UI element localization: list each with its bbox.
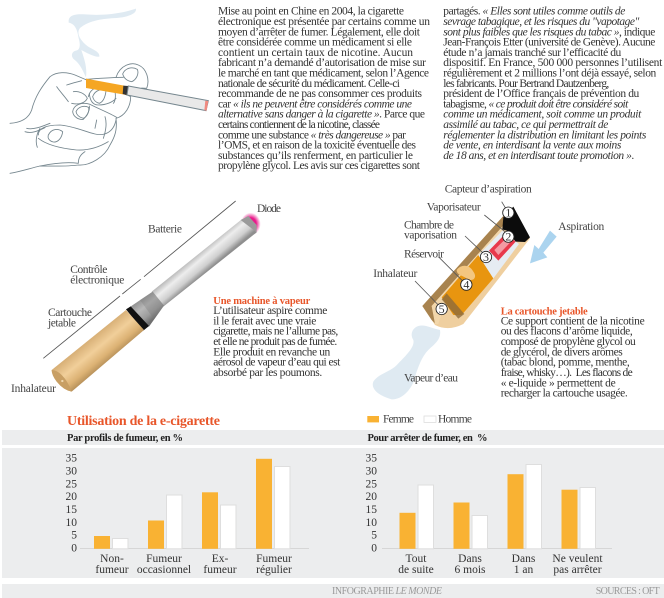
left chart bars homme — [112, 466, 290, 549]
labels: disposable cartridge: Inhalateur — [373, 268, 417, 280]
body text: first column: le marché en tant que médicament, selon l’Agence — [218, 68, 429, 80]
right chart baseline — [382, 548, 612, 549]
caption: une machine à vapeur: il le ferait avec une vraie — [213, 315, 316, 327]
body text: second column: président de l’Office français de prévention du — [443, 88, 640, 100]
labels: electronic cigarette: électronique — [70, 275, 124, 287]
cigarette — [86, 79, 208, 111]
left chart baseline — [80, 548, 309, 549]
caption: une machine à vapeur: Une machine à vapeur — [213, 296, 311, 307]
cartridge body and internals — [415, 202, 530, 328]
labels: disposable cartridge: Chambre de — [404, 219, 454, 231]
labels: electronic cigarette — [11, 203, 281, 395]
cartridge body and internals: 2 — [505, 230, 511, 244]
body text: first column: contient un certain taux de nicotine. Aucun — [218, 47, 413, 59]
body text: first column: nationale de sécurité du médicament. Celle-ci — [218, 78, 400, 90]
caption: la cartouche jetable: composé de propylène glycol ou — [501, 336, 636, 348]
left chart category labels: Fumeur — [146, 553, 182, 565]
caption: la cartouche jetable: fraise, whisky…). Les flacons de — [501, 367, 633, 379]
labels: electronic cigarette: Batterie — [148, 224, 182, 236]
body text: second column: réglementer la distribution en limitant les points — [443, 129, 647, 141]
right chart y axis: 15 — [366, 504, 377, 516]
body text: second column: les fabricants. Pour Bertrand Dautzenberg, — [443, 78, 609, 90]
left chart category labels: Non- — [100, 553, 124, 565]
body text: first column: être considérée comme un médicament si elle — [218, 37, 412, 49]
arrow: aspiration — [530, 231, 557, 263]
cartridge body and internals: 4 — [463, 278, 469, 292]
caption: la cartouche jetable — [501, 306, 645, 400]
right chart y axis: 10 — [366, 517, 377, 529]
right chart y axis: 20 — [366, 491, 377, 503]
black ring — [126, 306, 149, 331]
left chart y axis: 35 — [66, 453, 77, 465]
body text: first column: recommande de ne pas consommer ces produits — [218, 88, 423, 100]
hand outline — [10, 64, 148, 173]
cartridge body and internals: 1 — [505, 206, 511, 220]
body text: first column: fabricant n’a demandé d’autorisation de mise sur — [218, 57, 426, 69]
cartridge body and internals: 5 — [439, 302, 445, 316]
body text: second column: dispositif. En France, 500 000 personnes l’utilisent — [443, 57, 663, 69]
right chart category labels: 1 an — [514, 564, 533, 576]
caption: une machine à vapeur: cigarette, mais ne l’allume pas, — [213, 326, 338, 338]
body text: first column: car « ils ne peuvent être considérés comme une — [218, 98, 412, 110]
left chart: par profils de fumeur — [66, 433, 309, 576]
right chart y axis: 0 — [371, 542, 377, 554]
left chart heading: Par profils de fumeur, en % — [67, 433, 183, 444]
left chart y axis: 10 — [66, 517, 77, 529]
labels: disposable cartridge: Vapeur d’eau — [404, 372, 458, 384]
labels: disposable cartridge: Vaporisateur — [427, 201, 481, 213]
left chart category labels: occasionnel — [137, 564, 191, 576]
right chart category labels: 6 mois — [454, 564, 486, 576]
battery — [152, 219, 257, 307]
body text: first column: alternative sans danger à la cigarette ». Parce que — [218, 109, 425, 121]
diode glow — [241, 213, 261, 235]
left chart category labels: régulier — [256, 564, 292, 576]
illustration: electronic cigarette — [43, 201, 261, 392]
caption: une machine à vapeur: L’utilisateur aspire comme — [213, 305, 327, 317]
labels: electronic cigarette: Contrôle — [70, 264, 107, 276]
right chart category labels: Tout — [406, 553, 427, 565]
labels: electronic cigarette: Diode — [257, 203, 281, 215]
footer band — [2, 584, 664, 598]
numbered markers — [436, 207, 514, 315]
caption: la cartouche jetable: (tabac blond, pomme, menthe, — [501, 357, 630, 369]
left chart y axis: 15 — [66, 504, 77, 516]
cartridge — [52, 310, 144, 392]
left chart category labels — [95, 553, 292, 576]
left chart category labels: fumeur — [95, 564, 129, 576]
caption: une machine à vapeur — [213, 296, 341, 379]
caption: la cartouche jetable: de glycérol, de divers arômes — [501, 346, 623, 358]
legend: Homme — [438, 414, 472, 426]
illustration: hand holding an e-cigarette — [10, 9, 208, 173]
footer credit: INFOGRAPHIE LE MONDE — [332, 586, 442, 597]
body text: first column: l’OMS, et en raison de la toxicité éventuelle des — [218, 140, 417, 152]
body text: second column: partagés. « Elles sont utiles comme outils de — [443, 6, 625, 18]
right chart category labels: Ne veulent — [552, 553, 603, 565]
body text: second column: régulièrement et 2 millions l’ont déjà essayé, selon — [443, 68, 657, 80]
body text: second column: de vente, en interdisant la vente aux moins — [443, 140, 622, 152]
body text: first column: certains contiennent de la nicotine, classée — [218, 119, 380, 131]
body text: first column: propylène glycol. Les avis sur ces cigarettes sont — [218, 160, 421, 172]
labels: disposable cartridge: Aspiration — [558, 221, 605, 233]
body text: second column: sevrage tabagique, et les risques du "vapotage" — [443, 16, 639, 28]
labels: disposable cartridge: Capteur d’aspiration — [445, 184, 532, 196]
chart background panel — [2, 448, 664, 578]
body text: first column: moyen d’arrêter de fumer. Légalement, elle doit — [218, 26, 421, 38]
left chart y axis: 5 — [71, 530, 77, 542]
body text: second column: sont plus faibles que les risques du tabac », indique — [443, 26, 655, 38]
guide lines — [43, 201, 236, 358]
left chart category labels: Fumeur — [256, 553, 292, 565]
right chart y axis: 25 — [366, 478, 377, 490]
chart section title: Utilisation de la e-cigarette — [67, 414, 220, 429]
caption: la cartouche jetable: Ce support contient de la nicotine — [501, 315, 645, 327]
body text: second column: tabagisme, « ce produit doit être considéré soit — [443, 98, 629, 110]
right chart y axis: 30 — [366, 466, 377, 478]
body text: first column — [218, 6, 430, 172]
cartridge body and internals: 3 — [483, 250, 489, 264]
caption: une machine à vapeur: aérosol de vapeur d’eau qui est — [213, 357, 341, 369]
legend: Femme — [383, 414, 414, 426]
right chart category labels: pas arrêter — [553, 564, 602, 576]
electronic control — [129, 292, 164, 327]
left chart y axis — [66, 453, 77, 554]
body text: second column — [443, 6, 663, 162]
left chart y axis: 25 — [66, 478, 77, 490]
right chart: pour arrêter de fumer — [366, 433, 612, 576]
body text: second column: Jean-François Etter (université de Genève). Aucune — [443, 37, 655, 49]
right chart category labels — [398, 553, 603, 576]
body text: first column: électronique est présentée par certains comme un — [218, 16, 430, 28]
caption: la cartouche jetable: « e-liquide » permettent de — [501, 377, 616, 389]
right chart category labels: Dans — [458, 553, 482, 565]
illustration: disposable cartridge cutaway — [373, 202, 557, 399]
body text: second column: comme un médicament, soit comme un produit — [443, 109, 642, 121]
right chart bars homme — [418, 464, 596, 549]
labels: electronic cigarette: Cartouche — [48, 307, 92, 319]
labels: electronic cigarette: jetable — [47, 317, 76, 329]
body text: first column: comme une substance « très dangereuse » par — [218, 129, 406, 141]
water vapour — [373, 325, 440, 399]
caption: une machine à vapeur: absorbé par les poumons. — [213, 367, 322, 379]
caption: la cartouche jetable: La cartouche jetable — [501, 306, 588, 317]
labels: electronic cigarette: Inhalateur — [11, 383, 56, 395]
caption: une machine à vapeur: et elle ne produit pas de fumée. — [213, 336, 337, 348]
left chart y axis: 30 — [66, 466, 77, 478]
right chart y axis — [366, 453, 377, 554]
right chart category labels: de suite — [398, 564, 434, 576]
caption: la cartouche jetable: recharger la cartouche usagée. — [501, 388, 628, 400]
body text: first column: Mise au point en Chine en 2004, la cigarette — [218, 6, 404, 18]
labels: disposable cartridge: vaporisation — [404, 229, 457, 241]
legend — [367, 414, 472, 426]
body text: second column: étude n’a jamais tranché sur l’efficacité du — [443, 47, 622, 59]
left chart category labels: Ex- — [212, 553, 228, 565]
body text: first column: substances qu’ils renferment, en particulier le — [218, 150, 413, 162]
left chart category labels: fumeur — [203, 564, 237, 576]
footer sources: SOURCES : OFT — [596, 586, 660, 597]
smoke wisp — [69, 9, 136, 77]
labels: disposable cartridge — [373, 184, 605, 384]
right chart category labels: Dans — [512, 553, 536, 565]
body text: second column: assimilé au tabac, ce qui permettrait de — [443, 119, 608, 131]
left chart y axis: 20 — [66, 491, 77, 503]
caption: une machine à vapeur: Elle produit en revanche un — [213, 346, 331, 358]
chart header band — [2, 430, 664, 445]
right chart heading: Pour arrêter de fumer, en % — [368, 433, 488, 444]
body text: second column: de 18 ans, et en interdisant toute promotion ». — [443, 150, 634, 162]
left chart bars femme — [94, 459, 272, 549]
left chart y axis: 0 — [71, 542, 77, 554]
right chart y axis: 5 — [371, 530, 377, 542]
right chart y axis: 35 — [366, 453, 377, 465]
right chart bars femme — [400, 474, 578, 549]
caption: la cartouche jetable: ou des flacons d’arôme liquide, — [501, 325, 633, 337]
labels: disposable cartridge: Réservoir — [404, 248, 444, 260]
